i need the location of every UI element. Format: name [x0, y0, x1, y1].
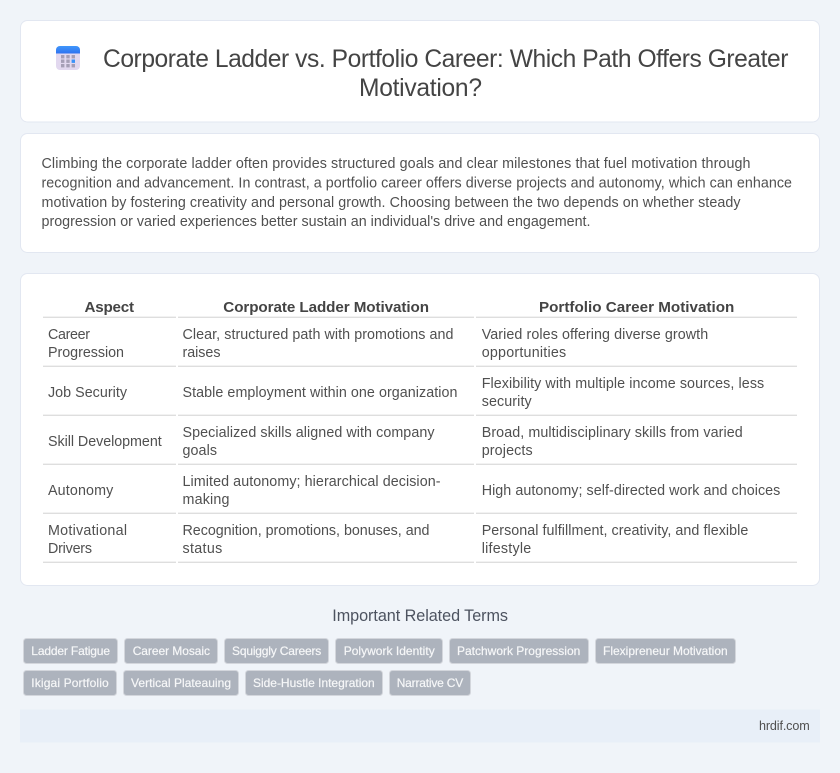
row: motivational drivers: Motivational: [48, 523, 127, 539]
tag: Side-Hustle Integration: [246, 670, 382, 696]
row: motivational drivers: [48, 523, 748, 557]
tag: Vertical Plateauing: Vertical Plateauing: [131, 676, 231, 690]
intro paragraph: Climbing the corporate ladder often provides structured goals and clear milestones that fuel motivation through: [42, 156, 751, 172]
tag: Polywork Identity: Polywork Identity: [344, 644, 435, 658]
row: autonomy: High autonomy; self-directed work and choices: [482, 483, 780, 499]
tag: Patchwork Progression: [450, 638, 588, 664]
row: career progression: Career: [48, 327, 90, 343]
row: motivational drivers: Personal fulfillment, creativity, and flexible: [482, 523, 748, 539]
tag: Patchwork Progression: Patchwork Progression: [457, 644, 580, 658]
table header: Portfolio Career Motivation: [539, 299, 734, 316]
intro paragraph: progression or varied experiences better sustain an individual's drive and engagement.: [42, 214, 590, 230]
row: career progression: opportunities: [482, 345, 566, 361]
panel: title: [20, 20, 820, 122]
tag: Squiggly Careers: Squiggly Careers: [232, 644, 321, 658]
row: motivational drivers: status: [182, 541, 222, 557]
tag: Flexipreneur Motivation: Flexipreneur Motivation: [603, 644, 728, 658]
intro paragraph: [42, 156, 792, 230]
row: job security: Job Security: [48, 385, 128, 401]
row: skill development: Specialized skills aligned with company: [182, 425, 435, 441]
tag: Polywork Identity: [336, 638, 442, 664]
tag: Vertical Plateauing: [124, 670, 238, 696]
row: career progression: [48, 327, 708, 361]
row: job security: Flexibility with multiple income sources, less: [482, 376, 764, 392]
footer: [20, 710, 820, 742]
tag: Squiggly Careers: [224, 638, 328, 664]
row: job security: [48, 376, 764, 410]
icon: calendar: [56, 46, 80, 70]
row: skill development: Broad, multidisciplinary skills from varied: [482, 425, 743, 441]
tag: Career Mosaic: [124, 638, 218, 664]
row: skill development: projects: [482, 443, 533, 459]
tag: Side-Hustle Integration: Side-Hustle Integration: [253, 676, 375, 690]
tag: Ladder Fatigue: [24, 638, 118, 664]
tag: Ladder Fatigue: Ladder Fatigue: [31, 644, 110, 658]
tag: Ikigai Portfolio: Ikigai Portfolio: [31, 676, 109, 690]
intro paragraph: recognition and advancement. In contrast, a portfolio career offers diverse projects and autonomy, which can enhance: [42, 175, 792, 191]
title text: Motivation?: [359, 75, 482, 102]
heading: related terms: Important Related Terms: [332, 607, 508, 625]
row: autonomy: Autonomy: [48, 483, 114, 499]
footer: hrdif.com: [759, 719, 810, 733]
title text: Corporate Ladder vs. Portfolio Career: Which Path Offers Greater: [103, 46, 788, 73]
tag: Narrative CV: Narrative CV: [397, 676, 463, 690]
row: job security: security: [482, 394, 533, 410]
row: motivational drivers: lifestyle: [482, 541, 531, 557]
tag: Ikigai Portfolio: [24, 670, 116, 696]
tag: Career Mosaic: Career Mosaic: [133, 644, 210, 658]
row: career progression: raises: [182, 345, 220, 361]
intro paragraph: motivation by fostering creativity and personal growth. Choosing between the two depends on whether steady: [42, 195, 741, 211]
row: autonomy: making: [182, 492, 230, 508]
row: motivational drivers: Drivers: [48, 541, 92, 557]
tag: Flexipreneur Motivation: [596, 638, 736, 664]
row: career progression: Progression: [48, 345, 124, 361]
row: autonomy: Limited autonomy; hierarchical decision-: [182, 474, 441, 490]
row: autonomy: [48, 474, 780, 508]
row: skill development: [48, 425, 743, 459]
table header: Corporate Ladder Motivation: [223, 299, 429, 316]
row: skill development: goals: [182, 443, 217, 459]
panel: introduction: [20, 134, 820, 252]
row: career progression: Varied roles offering diverse growth: [482, 327, 708, 343]
row: career progression: Clear, structured path with promotions and: [182, 327, 454, 343]
panel: related term tags: [24, 638, 736, 696]
panel: comparison table: [20, 274, 820, 586]
tag: Narrative CV: [390, 670, 470, 696]
row: job security: Stable employment within one organization: [182, 385, 458, 401]
row: motivational drivers: Recognition, promotions, bonuses, and: [182, 523, 430, 539]
row: skill development: Skill Development: [48, 434, 162, 450]
table header: Aspect: [84, 299, 134, 316]
title text: [103, 46, 788, 102]
table header: [84, 299, 734, 316]
